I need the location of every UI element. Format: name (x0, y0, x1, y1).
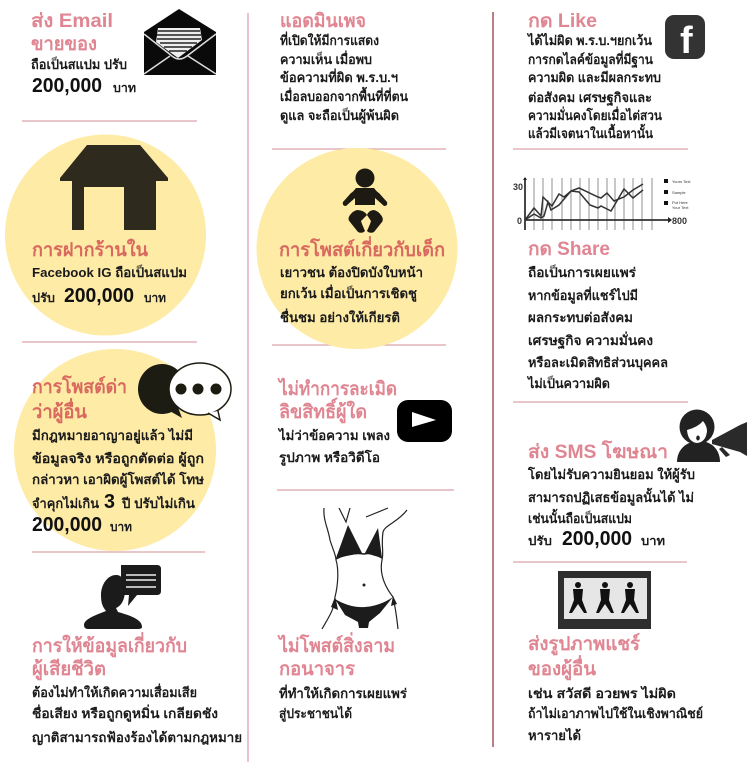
text: obscene body (279, 684, 407, 722)
text: like body: ความผิด และมีผลกระทบ (528, 70, 661, 85)
text: email fine: บาท (113, 81, 136, 95)
heading: photos: ส่งรูปภาพแชร์ (528, 633, 641, 656)
heading: deceased: ผู้เสียชีวิต (32, 658, 106, 681)
heading: email: ส่ง Email (31, 11, 113, 32)
text: defamation body: 200,000 (32, 514, 102, 536)
text: copyright body: รูปภาพ หรือวิดีโอ (279, 449, 380, 466)
text: like body: ได้ไม่ผิด พ.ร.บ.ฯยกเว้น (526, 32, 652, 48)
icon: bikini figure (322, 508, 407, 629)
panel: email spam (31, 9, 216, 97)
text: SMS body: 200,000 (562, 528, 632, 550)
text: admin body (280, 31, 408, 124)
line chart: Yours Text (672, 179, 691, 184)
text: photos body: เช่น สวัสดี อวยพร ไม่ผิด (528, 685, 676, 701)
text: SMS body: สามารถปฏิเสธข้อมูลนั้นได้ ไม่ (528, 487, 694, 506)
heading: shop: การฝากร้านใน (32, 238, 148, 261)
line chart: Your Text (672, 205, 689, 210)
text: share body: เศรษฐกิจ ความมั่นคง (528, 331, 653, 350)
icon: person with chat (84, 565, 161, 629)
text: share body: หรือละเมิดสิทธิส่วนบุคคล (528, 355, 668, 371)
text: photos body: หารายได้ (528, 727, 581, 743)
heading: copyright: ลิขสิทธิ์ผู้ใด (279, 397, 367, 424)
text: share body: ไม่เป็นความผิด (526, 374, 610, 391)
text: email fine: 200,000 (32, 75, 102, 97)
heading: email (31, 11, 113, 55)
text: children body (280, 264, 423, 325)
heading: defamation (32, 375, 127, 424)
text: defamation body: ปี ปรับไม่เกิน (121, 495, 195, 511)
text: deceased body: ชื่อเสียง หรือถูกดูหมิ่น เกลียดชัง (32, 704, 218, 722)
line chart: 0 (517, 216, 522, 226)
text: shop fine (32, 263, 187, 307)
text: defamation body: บาท (110, 520, 132, 534)
panel: page admin (280, 11, 408, 124)
heading: deceased: การให้ข้อมูลเกี่ยวกับ (32, 632, 187, 658)
text: photos body: ถ้าไม่เอาภาพไปใช้ในเชิงพาณิชย์ (528, 705, 703, 721)
panel: deceased (32, 565, 242, 746)
heading: defamation: การโพสต์ด่า (32, 375, 127, 398)
text: deceased body: ญาติสามารถฟ้องร้องได้ตามกฎหมาย (32, 729, 242, 746)
highlight circle (256, 148, 458, 349)
text: deceased body (32, 683, 242, 746)
text: like body: การกดไลค์ข้อมูลที่มีฐาน (528, 50, 653, 69)
icon: speech bubbles (138, 363, 231, 420)
icon: open envelope (144, 9, 216, 75)
text: shop fine: 200,000 (64, 285, 134, 307)
text: defamation body: 3 (104, 491, 115, 513)
panel: press share (513, 177, 691, 391)
line chart: 800 (672, 216, 687, 226)
text: SMS body: เช่นนั้นถือเป็นสแปม (528, 508, 632, 526)
panel: SMS ads (527, 410, 747, 550)
highlight circle (5, 134, 206, 336)
text: like body: แล้วมีเจตนาในเนื้อหานั้น (528, 123, 653, 141)
text: obscene body: สู่ประชาชนได้ (279, 705, 352, 722)
panel: copyright (277, 377, 452, 466)
icon: photo frame (558, 571, 651, 629)
heading: copyright (277, 377, 397, 424)
text: shop fine: ปรับ (32, 291, 55, 305)
heading: share: กด Share (528, 239, 610, 260)
text: defamation body: จำคุกไม่เกิน (32, 495, 99, 512)
panel: posts about children (256, 148, 458, 349)
icon: facebook (665, 15, 705, 62)
heading: obscene: ไม่โพสต์สิ่งลาม (277, 632, 395, 657)
text: like body (526, 32, 662, 141)
text: SMS body: โดยไม่รับความยินยอม ให้ผู้รับ (527, 466, 695, 483)
heading: email: ขายของ (31, 34, 97, 55)
text: admin body: เมื่อลบออกจากพื้นที่ที่ตน (280, 86, 408, 104)
text: share body: หากข้อมูลที่แชร์ไปมี (528, 286, 638, 304)
text: admin body: ข้อความที่ผิด พ.ร.บ.ฯ (280, 68, 398, 85)
text: copyright body: ไม่ว่าข้อความ เพลง (277, 427, 390, 443)
text: email fine (31, 55, 136, 97)
text: children body: ชื่นชม อย่างให้เกียรติ (280, 308, 400, 325)
text: admin body: ดูแล จะถือเป็นผู้พ้นผิด (280, 106, 399, 124)
panel: defamation (14, 349, 231, 551)
text: SMS body: บาท (641, 534, 665, 548)
text: email fine: ถือเป็นสแปม ปรับ (31, 55, 127, 72)
icon: woman with megaphone (677, 410, 747, 462)
text: defamation body: กล่าวหา เอาผิดผู้โพสต์ได้ โทษ (32, 471, 204, 488)
text: children body: ยกเว้น เมื่อเป็นการเชิดชู (280, 284, 417, 302)
highlight circle (14, 349, 216, 551)
panel: obscene content (277, 508, 407, 722)
text: admin body: ความเห็น เมื่อพบ (280, 50, 372, 67)
heading: admin: แอดมินเพจ (280, 11, 366, 32)
icon: baby (343, 168, 387, 233)
text: children body: เยาวชน ต้องปิดบังใบหน้า (280, 264, 423, 280)
panel: selling on Facebook (5, 134, 206, 336)
text: share body: ผลกระทบต่อสังคม (528, 310, 633, 325)
heading: obscene (277, 632, 395, 680)
heading: photos (528, 633, 641, 681)
heading: children: การโพสต์เกี่ยวกับเด็ก (279, 236, 445, 261)
text: like body: ต่อสังคม เศรษฐกิจและ (528, 90, 652, 107)
heading: defamation: ว่าผู้อื่น (32, 398, 87, 424)
icon: facebook: f (680, 20, 693, 62)
line chart: Sample (672, 190, 686, 195)
line chart: 30 (513, 182, 523, 192)
heading: copyright: ไม่ทำการละเมิด (277, 377, 397, 400)
heading: deceased (32, 632, 187, 681)
text: defamation body: มีกฎหมายอาญาอยู่แล้ว ไม่มี (32, 427, 193, 444)
line chart (513, 177, 691, 230)
heading: like: กด Like (528, 11, 597, 32)
icon: video play (397, 400, 452, 442)
text: like body: ความมั่นคงโดยเมื่อไต่สวน (528, 106, 662, 123)
text: SMS body (527, 466, 695, 550)
heading: obscene: กอนาจาร (279, 659, 356, 680)
heading: photos: ของผู้อื่น (528, 655, 596, 681)
text: share body: ถือเป็นการเผยแพร่ (528, 263, 636, 280)
text: copyright body (277, 427, 390, 466)
text: defamation body: ข้อมูลจริง หรือถูกตัดต่อ ผู้ถูก (32, 451, 204, 467)
text: photos body (528, 685, 703, 743)
text: share body (526, 263, 668, 391)
heading: SMS: ส่ง SMS โฆษณา (528, 440, 668, 463)
text: SMS body: ปรับ (528, 534, 552, 548)
text: obscene body: ที่ทำให้เกิดการเผยแพร่ (279, 684, 407, 701)
text: shop fine: บาท (144, 291, 166, 305)
panel: press like (526, 11, 705, 141)
text: deceased body: ต้องไม่ทำให้เกิดความเสื่อมเสีย (32, 683, 197, 700)
line chart: Put Here (672, 200, 689, 205)
text: admin body: ที่เปิดให้มีการแสดง (280, 31, 379, 48)
text: shop fine: Facebook IG ถือเป็นสแปม (32, 263, 187, 280)
panel: sharing photos (528, 571, 703, 743)
text: defamation body (32, 427, 204, 536)
icon: shop (60, 145, 168, 230)
